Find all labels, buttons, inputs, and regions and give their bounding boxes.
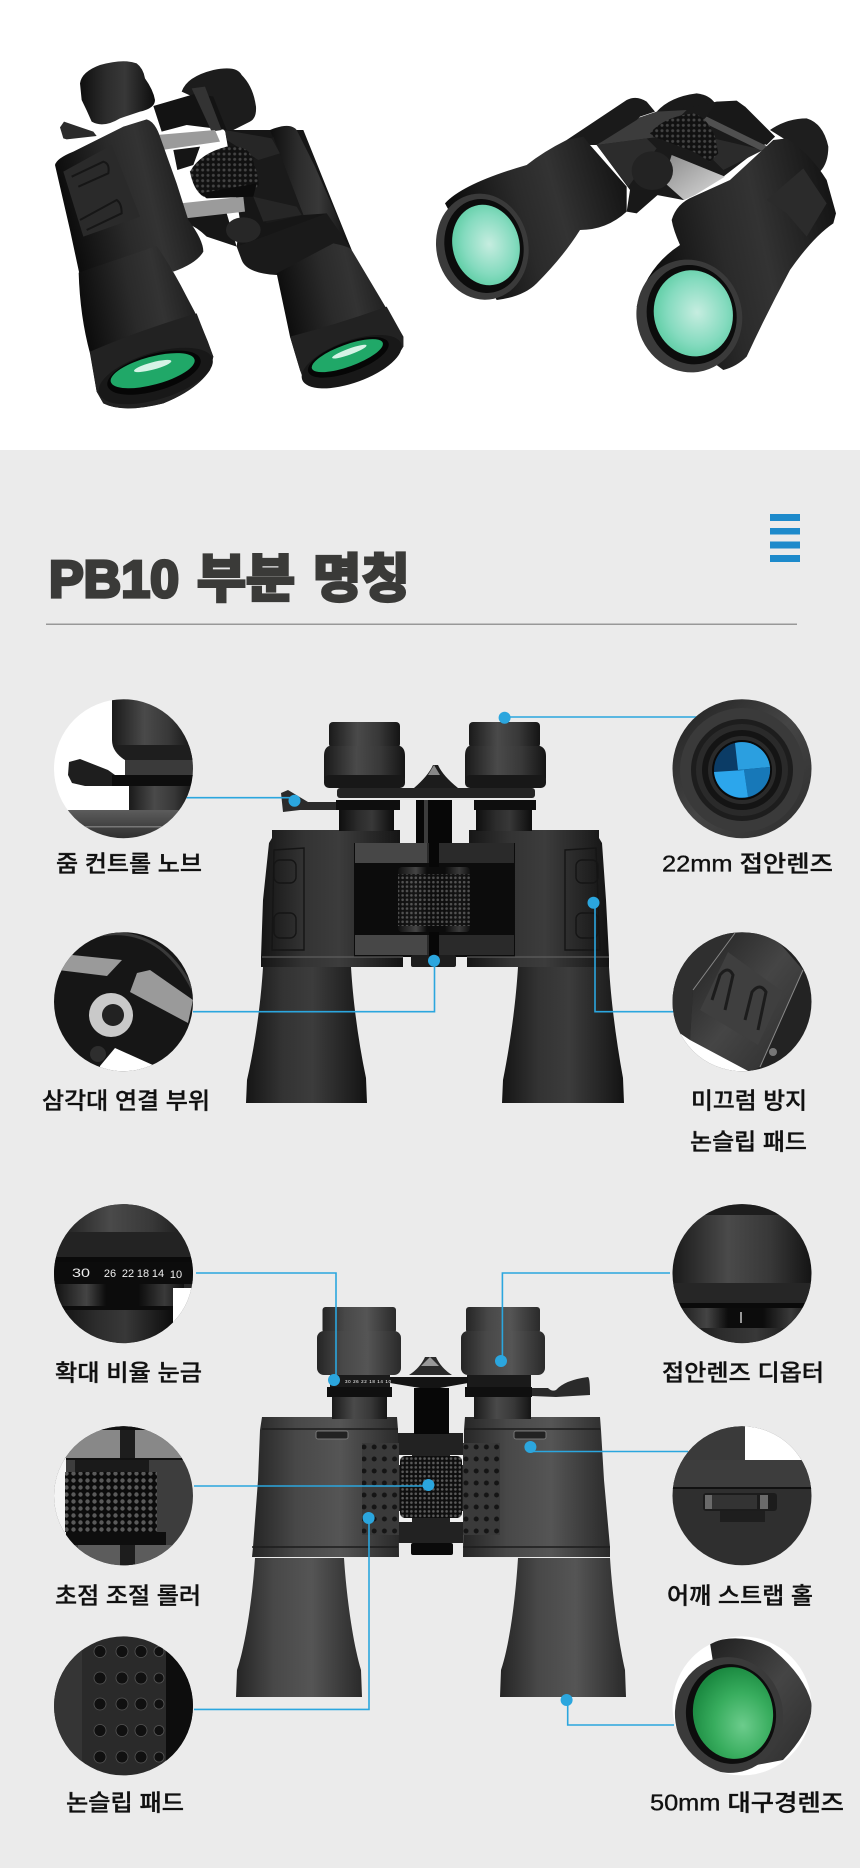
body right xyxy=(463,1417,610,1557)
scale numbers: 30 xyxy=(72,1266,90,1280)
zoom lever xyxy=(532,1377,590,1397)
icon: blue menu bars xyxy=(770,514,800,562)
diagram: binoculars rear view xyxy=(246,722,624,1103)
label: nonslip pad: 논슬립 패드 xyxy=(66,1790,184,1816)
label: eyepiece diopter: 접안렌즈 디옵터 xyxy=(662,1360,824,1386)
detail circle: nonslip pad xyxy=(54,1636,194,1776)
scale numbers: 10 xyxy=(170,1269,182,1281)
label: focus roller: 초점 조절 롤러 xyxy=(55,1583,201,1609)
grip panels xyxy=(262,848,609,957)
title: 명칭 xyxy=(313,551,410,609)
title: 부분 xyxy=(197,551,295,609)
roller xyxy=(399,1455,463,1522)
strap holes xyxy=(316,1431,546,1439)
label: zoom control knob: 줌 컨트롤 노브 xyxy=(56,850,202,876)
tripod knob xyxy=(411,955,456,967)
label: anti-slip line 2: 논슬립 패드 xyxy=(690,1128,807,1154)
detail circle: 50mm objective lens xyxy=(667,1636,812,1780)
label: shoulder strap hole: 어깨 스트랩 홀 xyxy=(667,1583,813,1609)
nonslip dot pads xyxy=(362,1443,500,1535)
eyepiece right xyxy=(461,1307,545,1375)
top bridge and rings xyxy=(336,765,536,810)
focus roller xyxy=(398,867,470,932)
label: 22mm eyepiece: 22mm 접안렌즈 xyxy=(662,850,833,876)
label: magnification scale: 확대 비율 눈금 xyxy=(55,1360,202,1386)
tripod knob xyxy=(411,1543,453,1555)
band lines xyxy=(252,1429,610,1547)
barrel left xyxy=(236,1558,362,1697)
body left xyxy=(252,1417,399,1557)
callout dots xyxy=(288,712,600,1706)
rings xyxy=(327,1375,532,1397)
product photo: binoculars angled front xyxy=(55,61,408,416)
barrel left xyxy=(246,967,367,1103)
scale numbers: 14 xyxy=(152,1268,164,1280)
post xyxy=(414,1388,449,1434)
scale numbers: 26 xyxy=(104,1268,116,1280)
detail circle: 22mm eyepiece xyxy=(672,699,812,839)
detail circle: focus roller xyxy=(54,1426,194,1566)
diagram: binoculars front view xyxy=(236,1307,626,1697)
magnification scale: 30 26 22 18 14 10 xyxy=(345,1379,391,1384)
eyepiece right xyxy=(465,722,546,788)
barrel right xyxy=(500,1558,626,1697)
detail circle: tripod mount xyxy=(54,932,194,1075)
detail circle: zoom control knob xyxy=(54,699,194,840)
eyepiece left xyxy=(317,1307,401,1375)
scale numbers: 18 xyxy=(137,1268,149,1280)
detail circle: magnification scale xyxy=(54,1204,194,1344)
callout lines xyxy=(186,717,697,1725)
label: anti-slip line 1: 미끄럼 방지 xyxy=(691,1088,807,1114)
stems xyxy=(339,810,532,831)
detail circle: shoulder strap hole xyxy=(672,1426,813,1566)
scale numbers: 22 xyxy=(122,1268,134,1280)
zoom lever xyxy=(281,790,336,812)
scale numbers xyxy=(72,1268,182,1278)
body right xyxy=(467,830,609,967)
label: 50mm objective lens: 50mm 대구경렌즈 xyxy=(650,1790,844,1816)
center block xyxy=(354,843,515,957)
bridge and peak xyxy=(390,1357,468,1388)
bridge plates xyxy=(355,843,514,955)
title: PB10 xyxy=(49,551,179,609)
product photo: binoculars front lenses xyxy=(426,93,836,384)
heading divider xyxy=(46,624,797,625)
eyepiece left xyxy=(324,722,405,788)
detail circle: eyepiece diopter xyxy=(672,1204,812,1344)
panel: parts background xyxy=(0,450,860,1868)
stems xyxy=(332,1397,531,1419)
detail circle: anti-slip grip xyxy=(672,932,812,1075)
barrel right xyxy=(502,967,624,1103)
center post xyxy=(416,800,452,956)
center column xyxy=(398,1433,463,1543)
body left xyxy=(261,830,403,967)
label: tripod mount: 삼각대 연결 부위 xyxy=(42,1088,210,1114)
title xyxy=(49,551,410,609)
